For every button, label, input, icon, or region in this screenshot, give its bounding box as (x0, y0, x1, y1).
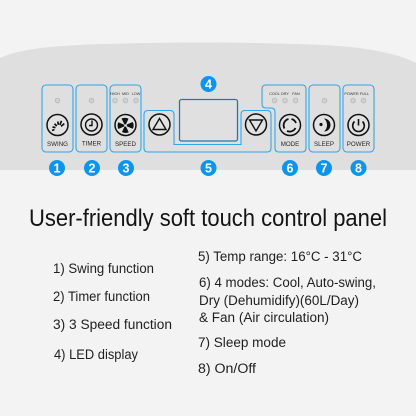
title: User-friendly soft touch control panel (29, 205, 387, 232)
panel: power button: POWER (344, 92, 359, 96)
panel: power button (343, 85, 374, 152)
left feature list: 4) LED display (54, 347, 138, 362)
LED display (180, 100, 238, 141)
icon: swing (47, 114, 68, 136)
panel: speed button: MID (122, 92, 129, 96)
label: timer: TIMER (82, 140, 102, 148)
panel: speed button (110, 85, 141, 152)
badge 7 (316, 160, 332, 176)
right feature list: 5) Temp range: 16°C - 31°C (198, 249, 362, 264)
right feature list: & Fan (Air circulation) (199, 310, 329, 325)
right feature list: 8) On/Off (198, 361, 256, 376)
icon: down arrow button (246, 114, 266, 135)
icon: sleep (314, 114, 334, 136)
panel: mode button: FAN (292, 92, 300, 96)
label: power: POWER (347, 141, 371, 148)
right feature list: 6) 4 modes: Cool, Auto-swing, (199, 275, 376, 290)
panel: swing button (42, 85, 73, 152)
left feature list: 3) 3 Speed function (53, 317, 172, 332)
label: speed: SPEED (115, 141, 137, 148)
badge 7: 7 (321, 162, 328, 176)
badge 2 (84, 160, 100, 176)
left feature list: 1) Swing function (53, 261, 154, 276)
badge 8 (350, 160, 366, 176)
left feature list (53, 261, 172, 362)
badge 6 (282, 160, 298, 176)
badge 2: 2 (89, 162, 96, 176)
badge 8: 8 (355, 162, 362, 176)
icon: mode (280, 114, 300, 136)
badge 1: 1 (54, 162, 61, 176)
icon: up arrow button (149, 114, 170, 135)
badge 1 (49, 160, 65, 176)
badge 3: 3 (123, 162, 130, 176)
panel: power button: FULL (360, 92, 369, 96)
badge 4 (200, 76, 216, 92)
panel: speed button: HIGH (110, 92, 120, 96)
badge 5 (200, 160, 216, 176)
label: swing: SWING (47, 141, 68, 148)
panel: timer button (76, 85, 107, 152)
panel: sleep button (309, 85, 340, 152)
panel: mode button: COOL (269, 92, 280, 96)
label: sleep: SLEEP (314, 141, 334, 148)
panel: mode button: DRY (281, 92, 289, 96)
badge 5: 5 (205, 162, 212, 176)
right feature list: Dry (Dehumidify)(60L/Day) (199, 293, 359, 308)
left feature list: 2) Timer function (53, 289, 150, 304)
icon: power (348, 114, 369, 136)
label: mode: MODE (281, 141, 299, 148)
panel: temperature control outline (144, 110, 271, 152)
icon: fan (115, 114, 136, 136)
panel: speed button: LOW (132, 92, 141, 96)
badge 6: 6 (287, 162, 294, 176)
badge 4: 4 (205, 78, 212, 92)
right feature list (198, 249, 376, 376)
right feature list: 7) Sleep mode (198, 335, 286, 350)
panel: mode button (262, 85, 306, 152)
badge 3 (118, 160, 134, 176)
icon: timer (81, 114, 102, 135)
control panel body (0, 43, 416, 170)
